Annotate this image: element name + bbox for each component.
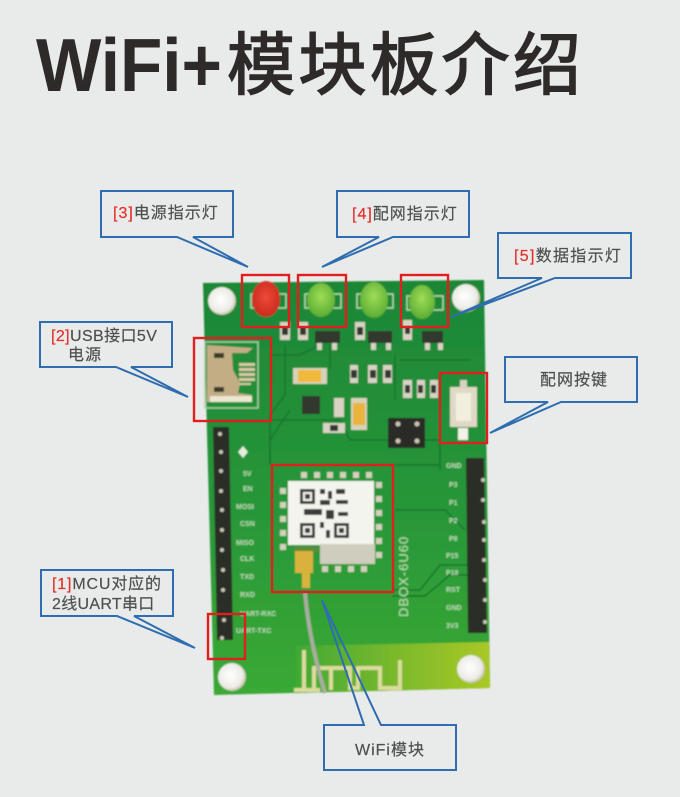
board silkscreen labels: P18 — [446, 570, 459, 577]
board silkscreen labels: GND — [446, 605, 462, 612]
callout: power indicator — [101, 191, 248, 267]
small components row — [280, 320, 443, 433]
board silkscreen labels: TXD — [240, 574, 254, 581]
antenna cable — [305, 592, 325, 693]
board silkscreen labels: CLK — [240, 556, 254, 563]
board silkscreen labels: P2 — [449, 518, 458, 525]
callout: data indicator — [451, 233, 631, 317]
title: WiFi+ — [36, 23, 222, 107]
board silkscreen labels: P8 — [449, 536, 458, 543]
callout: config button: 配网按键 — [540, 371, 608, 389]
module shield label with QR code — [288, 481, 375, 564]
red highlight boxes — [194, 275, 487, 659]
2x2 black header — [388, 418, 425, 448]
board silkscreen labels: UART-TXC — [236, 628, 271, 635]
diamond mark — [238, 446, 248, 458]
callout: WiFi module: WiFi模块 — [355, 741, 425, 759]
board silkscreen labels: EN — [243, 486, 253, 493]
board silkscreen labels: MOSI — [236, 504, 254, 511]
gold antenna connector — [294, 547, 318, 588]
LED footprints — [251, 294, 443, 310]
board silkscreen labels: MISO — [236, 540, 254, 547]
tact button — [450, 380, 477, 440]
left pin header — [213, 427, 233, 640]
circuit board photo — [194, 275, 490, 695]
copper traces — [270, 345, 470, 596]
yellow capacitors — [293, 368, 367, 430]
callout: network config indicator — [322, 191, 469, 267]
board silkscreen labels: RST — [446, 587, 461, 594]
board silkscreen labels: DBOX-6U60 — [396, 536, 411, 617]
callout: config button — [490, 357, 637, 433]
board silkscreen labels: P3 — [449, 482, 458, 489]
callout: power indicator: [3]电源指示灯 — [113, 204, 219, 222]
board silkscreen labels: GND — [446, 463, 462, 470]
power LED red — [252, 281, 280, 317]
callout: MCU UART — [41, 570, 195, 648]
config LED green — [307, 283, 335, 317]
board silkscreen labels: 3V3 — [446, 623, 459, 630]
board silkscreen labels: P1 — [449, 500, 458, 507]
USB connector — [205, 342, 258, 408]
callout: MCU UART: 2线UART串口 — [52, 595, 155, 613]
callout: data indicator: [5]数据指示灯 — [514, 247, 622, 265]
antenna area — [294, 642, 490, 693]
board silkscreen labels: RXD — [240, 592, 255, 599]
callout: WiFi module — [322, 600, 456, 770]
board silkscreen labels: UART-RXC — [240, 611, 276, 618]
callout: USB 5V power: [2]USB接口5V — [51, 327, 157, 345]
callout: USB 5V power: 电源 — [68, 346, 102, 364]
middle LED green — [360, 282, 388, 318]
callout: USB 5V power — [40, 322, 188, 397]
board silkscreen labels — [236, 463, 462, 635]
callout: network config indicator: [4]配网指示灯 — [352, 205, 458, 223]
callout: MCU UART: [1]MCU对应的 — [52, 574, 162, 593]
title — [36, 23, 585, 107]
board silkscreen labels: P15 — [446, 553, 459, 560]
board substrate — [203, 280, 490, 695]
data LED green — [409, 285, 435, 319]
title: 模块板介绍 — [227, 28, 585, 104]
mounting holes — [208, 284, 485, 691]
board silkscreen labels: CSN — [240, 521, 255, 528]
board silkscreen labels: 5V — [243, 471, 252, 478]
WiFi module chip — [280, 472, 382, 588]
right pin header — [466, 458, 487, 633]
